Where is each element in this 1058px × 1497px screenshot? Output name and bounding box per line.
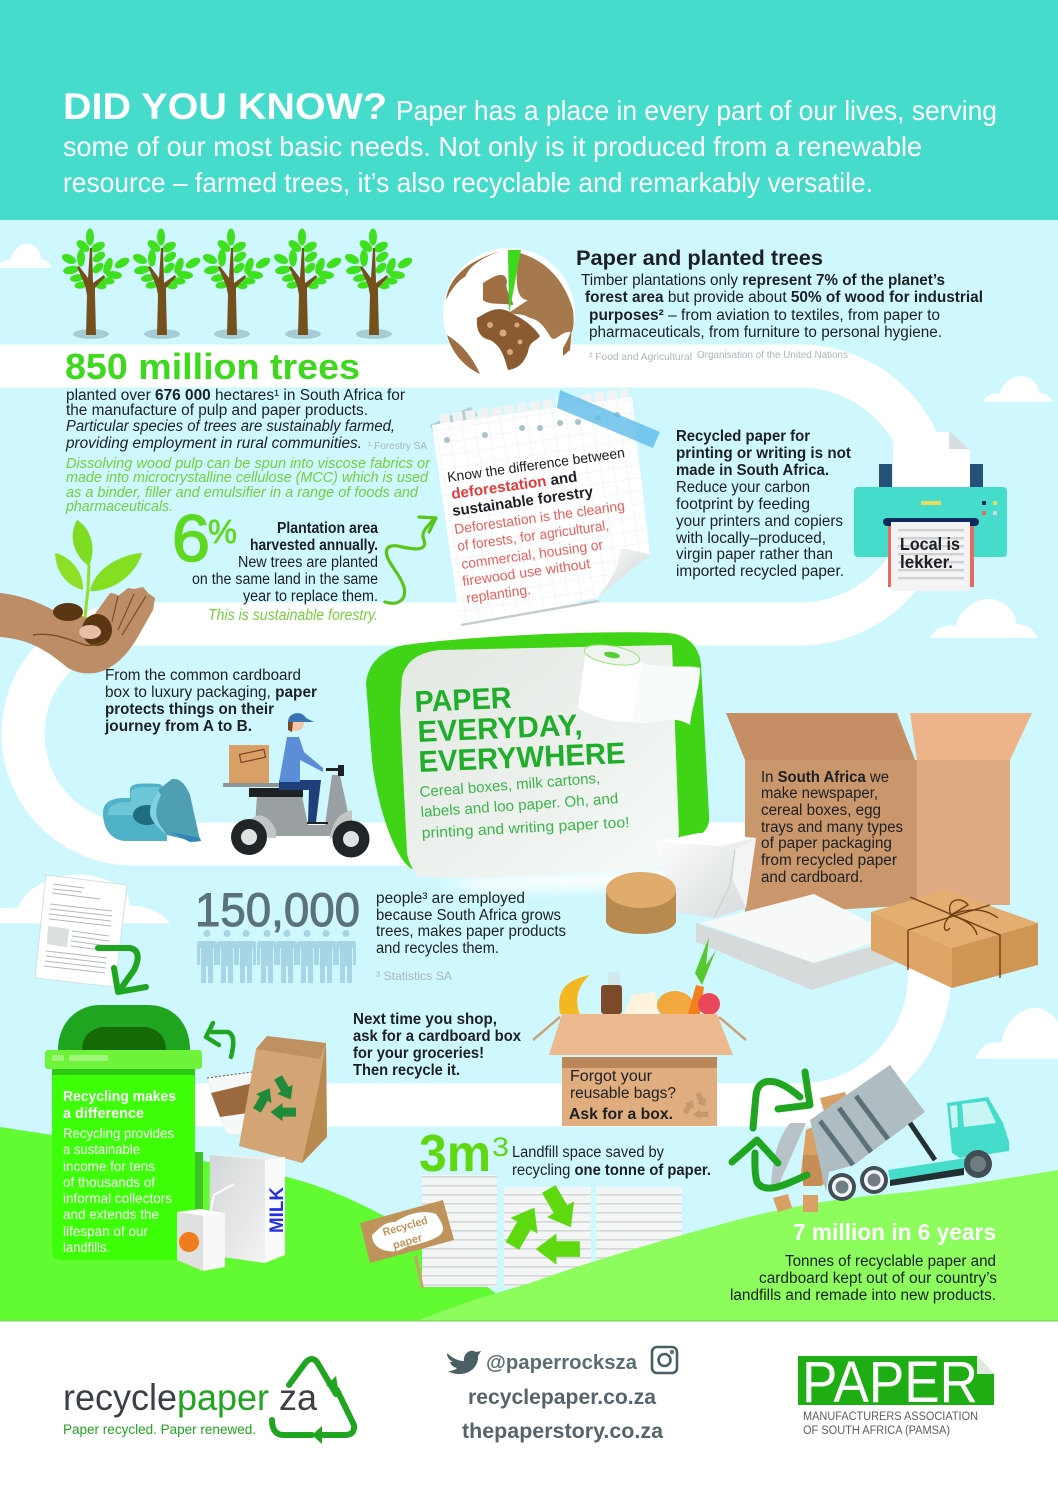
social links [447,1347,677,1443]
text: people employed: trees, makes paper products [376,923,566,940]
bin shadow [195,1152,203,1252]
text: recycled paper for printing: imported recycled paper. [676,563,844,580]
door flap [771,1123,806,1186]
text: tonnes of recyclable paper: Tonnes of recyclable paper and [785,1253,996,1270]
bin body text: Recycling provides [63,1125,174,1141]
illustration: white noodle box [655,833,756,918]
websites [462,1385,664,1443]
logo: PAMSA paper: MANUFACTURERS ASSOCIATION [803,1411,978,1423]
icon: instagram [652,1347,677,1373]
illustration: round box [606,872,676,934]
winding white road [0,366,930,1105]
text: recycled paper for printing: Reduce your carbon [676,479,810,496]
header intro text [63,95,997,198]
illustration: pizza box [696,894,895,990]
box text: In South Africa we [761,769,889,786]
heading: EVERYWHERE [418,737,626,779]
text: plantation area: year to replace them. [243,588,378,605]
piston [910,1123,935,1160]
text: recycled paper for printing: Recycled paper for [676,428,810,445]
bin body text: lifespan of our [63,1223,148,1239]
groceries [559,937,720,1019]
body: forest area but provide about 50% of wood for industrial [585,289,983,306]
text: plantation area: This is sustainable forestry. [208,607,378,624]
text: planted hectares: Particular species of trees are sustainably farmed, [66,418,395,435]
logo: recyclepaper za [63,1359,354,1444]
footnote [589,349,848,363]
soft shadow [440,860,690,890]
box text: reusable bags? [570,1085,676,1102]
text: people employed: ³ Statistics SA [376,969,452,983]
text: tonnes of recyclable paper [730,1253,997,1304]
text: plantation area: Plantation area [277,520,378,537]
arrow: from document to bin [98,948,146,992]
logo: PAMSA paper: PAPER [802,1350,978,1415]
bin body text: income for tens [63,1158,155,1174]
eurasia [510,253,574,339]
printer body [854,487,1007,557]
statistic: 150,000 people [195,883,360,983]
label: local is lekker: lekker. [900,552,953,572]
illustration: groceries box [533,937,746,1126]
europe [483,275,513,305]
text: tonnes of recyclable paper: cardboard kept out of our country’s [759,1270,997,1287]
heading: PAPER [414,682,513,719]
torn top edge [430,407,478,448]
text: recycled paper for printing [675,428,851,580]
text: recycled paper for printing: with locally–produced, [675,530,826,547]
text: recycled paper for printing: made in South Africa. [676,462,829,479]
text: plantation area: harvested annually. [250,537,378,554]
header banner [0,0,1058,220]
rim continents [446,251,572,374]
box text: of paper packaging [761,835,892,852]
note text: commercial, housing or [460,536,604,572]
footnote: Organisation of the United Nations [697,349,848,361]
text: dissolving wood pulp: pharmaceuticals. [65,499,173,515]
logo: recyclepaper za: recyclepaper za [63,1377,317,1418]
subtext: printing and writing paper too! [421,814,630,842]
text: planted hectares: the manufacture of pulp and paper products. [66,402,368,419]
curled corner [597,548,650,598]
pale page [400,645,679,878]
illustration: hand holding seedling [0,520,155,673]
text: people employed: because South Africa grows [376,907,561,924]
text: dissolving wood pulp: made into microcrystalline cellulose (MCC) which is used [66,470,429,486]
grid paper sheet [432,397,650,623]
wheels [828,1150,992,1201]
blue tape [557,390,660,448]
seedling [55,520,142,618]
websites: recyclepaper.co.za [468,1385,657,1409]
text: dissolving wood pulp [65,456,431,515]
statistic: 3m3: 3 [492,1132,509,1162]
illustration: tipping truck [771,1065,1009,1212]
text: recycled paper for printing: virgin paper rather than [676,546,833,563]
punched holes [444,412,620,443]
box text [761,769,903,886]
illustration: printer [854,431,1007,591]
text: next time you shop: Next time you shop, [353,1011,497,1028]
note text: Deforestation is the clearing [453,497,626,537]
statistic: 6 percent [172,501,237,575]
bin body [52,1068,195,1260]
note text: Know the difference between [446,444,626,485]
recycle icon [679,1092,711,1123]
box text: cereal boxes, egg [761,802,881,819]
bin heading [63,1089,176,1122]
subtext [419,770,630,842]
output slot [883,518,979,526]
text: cardboard box to luxury packaging: box to luxury packaging, paper [105,684,317,701]
subtext: labels and loo paper. Oh, and [420,790,619,821]
text: recycled paper for printing: footprint by feeding [676,496,810,513]
text: people employed [376,890,566,983]
illustration: delivery scooter [223,713,370,858]
illustration: heart-shaped box [103,779,201,842]
text: planted hectares [65,387,427,452]
chassis [888,1158,966,1180]
box text: Forgot your [570,1068,652,1085]
sign: recycled paper [360,1200,454,1288]
text: people employed: people³ are employed [376,890,525,907]
header intro text: some of our most basic needs. Not only is it produced from a renewable [63,131,922,162]
tipper body [810,1065,925,1192]
statistic: 850 million trees: 850 million trees [65,346,360,387]
box text [569,1068,676,1123]
statistic: 7 million in 6 years: 7 million in 6 years [793,1219,996,1245]
note: deforestation [430,390,660,626]
row of five trees [61,229,413,339]
panel: recycling bin [45,1005,203,1260]
illustration: large open cardboard box [726,713,1032,915]
bin heading: Recycling makes [63,1089,176,1105]
box text: from recycled paper [761,852,897,869]
text: planted hectares: providing employment in rural communities. [65,435,362,452]
green backing [366,632,709,870]
bin body text: informal collectors [63,1190,172,1206]
box text: trays and many types [761,819,903,836]
text: next time you shop: for your groceries! [353,1045,484,1062]
heading [414,682,626,779]
wheels [231,819,370,858]
body: purposes² – from aviation to textiles, from paper to [589,307,940,324]
footnote: ² Food and Agricultural [589,351,692,363]
text: recycled paper for printing: your printers and copiers [676,513,843,530]
text: dissolving wood pulp: as a binder, filler and emulsifier in a range of foods and [66,485,419,501]
text: people employed: and recycles them. [376,940,499,957]
thumb and creases [33,634,106,645]
paper in tray [893,432,970,488]
logo: recyclepaper za: Paper recycled. Paper renewed. [63,1422,256,1437]
green wedge [508,250,521,314]
text: cardboard box to luxury packaging: journey from A to B. [104,718,252,735]
globe with plantation wedge [443,248,575,380]
illustration: coffee cup [207,1072,257,1134]
body: Timber plantations only represent 7% of the planet’s [581,272,945,289]
text: landfill space saved: recycling one tonne of paper. [512,1162,711,1179]
text: planted hectares: ¹ Forestry SA [368,440,427,452]
label: local is lekker: Local is [900,534,960,554]
illustration: milk carton [209,1155,288,1263]
bin body text: of thousands of [63,1174,155,1190]
people icons [197,930,356,983]
text: paper and planted trees [576,246,983,363]
heading: Paper and planted trees [576,246,823,270]
text: cardboard box to luxury packaging [104,667,317,735]
cab [947,1097,1009,1158]
box text: make newspaper, [761,785,878,802]
heading: EVERYDAY, [417,709,583,749]
panel: paper everyday everywhere [366,632,709,890]
africa [477,309,540,370]
illustration: document with lines [35,875,127,987]
arrow: squiggle to note [385,517,436,603]
text: next time you shop [353,1011,521,1079]
text: dissolving wood pulp: Dissolving wood pulp can be spun into viscose fabrics or [66,456,431,472]
sign: recycled paper: Recycled [382,1215,429,1239]
note text: deforestation and [450,468,578,503]
statistic: 150,000 people: 150,000 [195,883,360,936]
illustration: milk carton: MILK [266,1187,288,1233]
printed sheet [891,522,970,591]
clouds [0,244,1058,1058]
soil [53,603,112,646]
illustration: paper bag [239,1036,327,1163]
text: planted hectares: planted over 676 000 hectares¹ in South Africa for [66,387,405,404]
header intro text: resource – farmed trees, it’s also recyclable and remarkably versatile. [63,167,873,198]
sky background [0,220,1058,1320]
platform and body [223,783,281,787]
right green hill [420,1170,1058,1320]
note text [446,444,626,606]
toilet roll [578,641,700,725]
subtext: Cereal boxes, milk cartons, [419,770,601,801]
text: cardboard box to luxury packaging: protects things on their [105,701,274,718]
text: next time you shop: Then recycle it. [353,1062,460,1079]
soft shadow under sheet [460,600,600,626]
heading: did you know: DID YOU KNOW? [63,86,387,127]
bin body text [63,1125,174,1255]
text: plantation area: New trees are planted [238,554,378,571]
bin heading: a difference [63,1106,144,1122]
logo: PAMSA paper: OF SOUTH AFRICA (PAMSA) [803,1425,950,1437]
footer [0,1320,1058,1497]
illustration: stacks of recycled paper [422,1175,682,1287]
bin body text: landfills. [63,1239,110,1255]
bin body text: and extends the [63,1206,159,1222]
text: cardboard box to luxury packaging: From the common cardboard [105,667,301,684]
bin lid dome [58,1005,190,1050]
hand [0,587,155,673]
statistic: 3m3: 3m [419,1125,491,1183]
note text: of forests, for agricultural, [456,517,610,554]
websites: thepaperstory.co.za [462,1419,664,1443]
text: plantation area: on the same land in the same [192,571,378,588]
box text: and cardboard. [761,869,863,886]
rider [279,713,328,824]
body [581,272,983,341]
illustration: wrapped parcel [871,890,1038,988]
parcel [229,745,269,783]
arrows: recycling loop [732,1072,810,1188]
arrow: small return arrow [206,1023,233,1057]
left green hill [0,1127,530,1320]
body: pharmaceuticals, from furniture to personal hygiene. [589,324,942,341]
bin rim [45,1050,202,1069]
handle: @paperrocksza [486,1352,638,1374]
sign: recycled paper: paper [392,1232,424,1252]
statistic: 6 percent: 6 [172,501,210,575]
bin body text: a sustainable [63,1141,140,1157]
text: tonnes of recyclable paper: landfills and remade into new products. [730,1287,996,1304]
text: recycled paper for printing: printing or writing is not [676,445,851,462]
icon: twitter bird [447,1351,481,1374]
statistic: 6 percent: % [208,513,237,550]
text: landfill space saved [512,1144,711,1179]
spilling cardboard [773,1092,852,1212]
illustration: juice box [177,1184,234,1271]
note text: firewood use without [461,555,591,589]
label: local is lekker [900,534,960,572]
recycling symbol on paper [496,1185,587,1273]
text: next time you shop: ask for a cardboard box [353,1028,521,1045]
header intro text: Paper has a place in every part of our lives, serving [396,95,997,126]
box text: Ask for a box. [569,1106,673,1123]
text: plantation area [192,520,378,624]
text: landfill space saved: Landfill space saved by [512,1144,664,1161]
note text: sustainable forestry [451,483,595,520]
note text: replanting. [465,581,532,606]
